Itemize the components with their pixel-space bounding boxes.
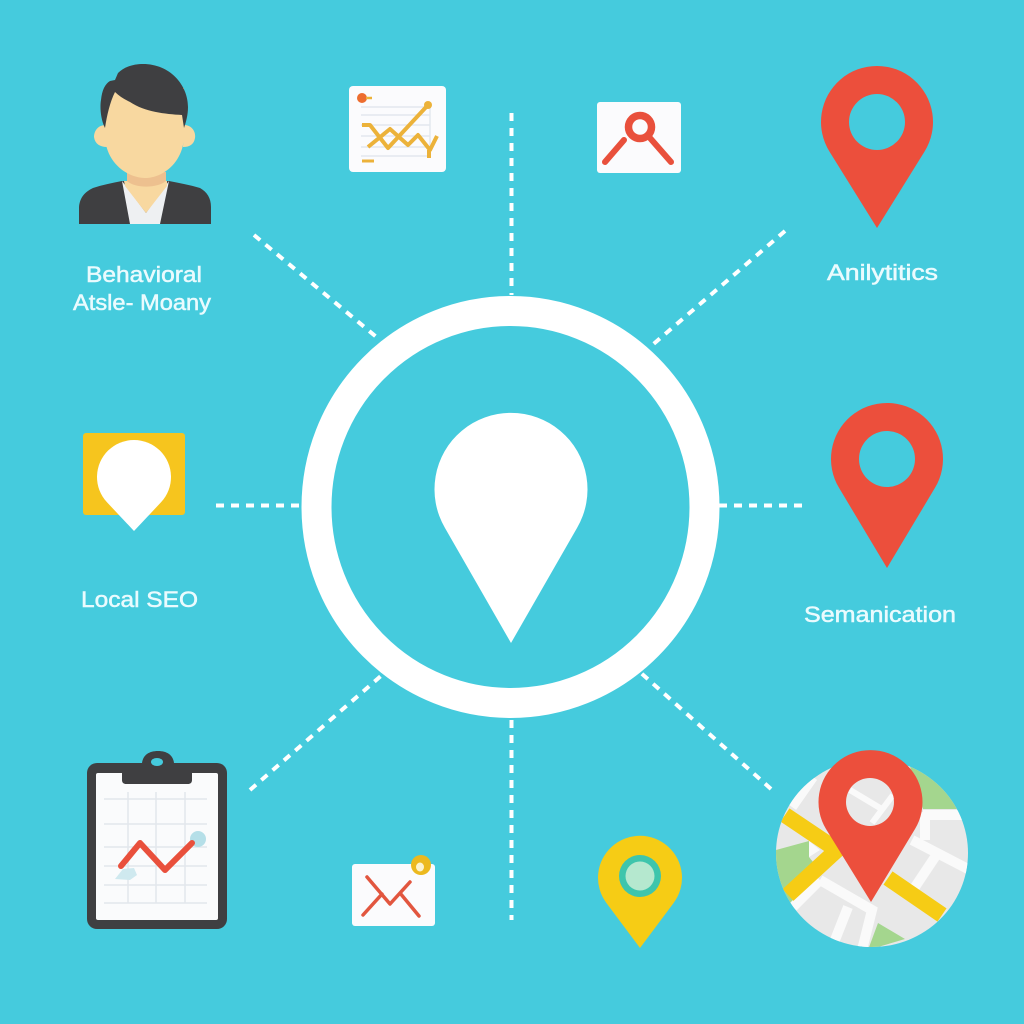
label: Local SEO: Local SEO: [81, 587, 198, 612]
icon: person avatar: [79, 64, 211, 224]
person body: [79, 181, 211, 224]
person ears: [94, 125, 195, 147]
label: Behavioral: [73, 262, 211, 315]
icon: search card: [597, 102, 681, 173]
person shirt: [122, 181, 169, 224]
icon: yellow pin: [598, 836, 682, 948]
map pin: [819, 750, 922, 902]
icon: red pin top right: [821, 66, 933, 228]
icon: central white pin: [435, 413, 588, 643]
label: Behavioral: Atsle- Moany: [73, 290, 211, 315]
icon: Local SEO speech pin: [83, 433, 185, 531]
icon: clipboard with chart: [87, 751, 227, 929]
label: Behavioral: Behavioral: [86, 262, 202, 287]
icon: red pin middle right: [831, 403, 943, 568]
person face: [105, 88, 184, 178]
map disc: [776, 766, 968, 947]
icon: chart card: [349, 86, 446, 172]
icon: round map with pin: [770, 750, 975, 955]
icon: envelope card: [352, 855, 435, 926]
central location ring: [316, 311, 704, 703]
label: Semanication: Semanication: [804, 602, 956, 627]
person hair: [100, 64, 188, 128]
label: Anilytitics: Anilytitics: [827, 260, 938, 285]
